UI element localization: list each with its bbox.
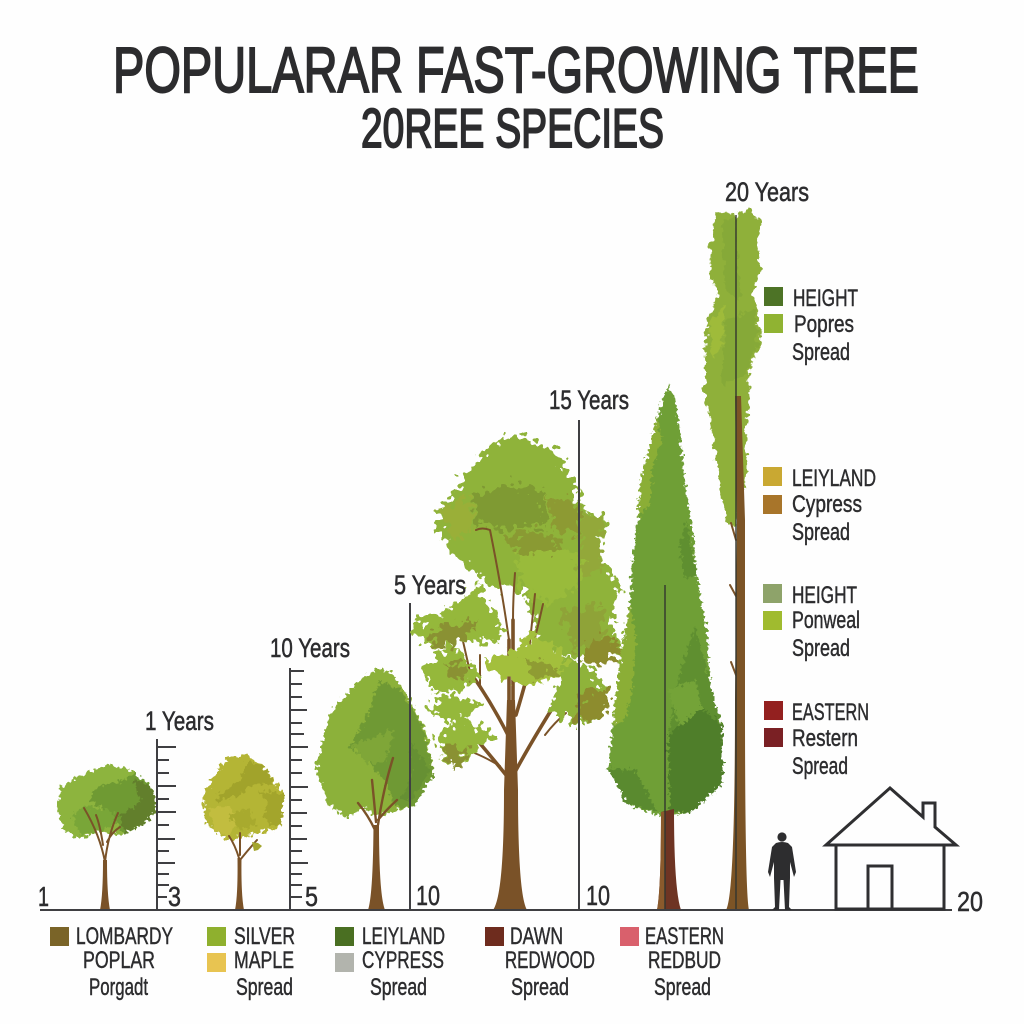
branches bbox=[84, 808, 120, 862]
year labels: 20 Years bbox=[725, 177, 809, 207]
side legend: height popres bbox=[764, 285, 858, 366]
title: 20REE SPECIES bbox=[361, 97, 664, 159]
year lines inside conifer and poplar bbox=[665, 215, 736, 910]
legend: dawn redwood bbox=[485, 923, 595, 1001]
axis numbers: 10 bbox=[416, 880, 440, 911]
year labels: 10 Years bbox=[270, 633, 350, 663]
person silhouette bbox=[768, 832, 796, 910]
axis numbers: 3 bbox=[168, 881, 181, 912]
tree: dawn redwood bbox=[412, 433, 624, 910]
year line: 15 bbox=[578, 420, 580, 910]
legend: silver maple: Spread bbox=[236, 974, 293, 1001]
ground baseline bbox=[40, 909, 952, 911]
poplar trunk bbox=[726, 396, 749, 910]
title bbox=[113, 34, 919, 159]
legend: leyland cypress: Spread bbox=[370, 974, 427, 1001]
tree: lombardy poplar at year 1 bbox=[57, 764, 157, 910]
side legend: eastern restern: Restern bbox=[792, 725, 858, 752]
legend: silver maple: MAPLE bbox=[234, 947, 294, 974]
legend: lombardy poplar bbox=[50, 923, 173, 1001]
year labels: 5 Years bbox=[394, 570, 466, 600]
side legend: height popres: Popres bbox=[794, 311, 854, 338]
branches bbox=[229, 833, 257, 860]
year labels: 15 Years bbox=[549, 385, 629, 415]
tree: cypress with tall conical crown bbox=[608, 385, 723, 910]
legend: leyland cypress: CYPRESS bbox=[362, 947, 444, 974]
axis numbers: 1 bbox=[38, 881, 49, 912]
axis numbers: 5 bbox=[305, 881, 318, 912]
trunk bbox=[493, 700, 527, 910]
upper crown bbox=[434, 433, 624, 664]
legend: leyland cypress: LEIYLAND bbox=[362, 923, 445, 950]
side legend: height ponweal: Spread bbox=[792, 635, 850, 662]
side legend: height popres: HEIGHT bbox=[793, 285, 858, 312]
side legend: leiyland cypress: Cypress bbox=[792, 491, 862, 518]
house outline bbox=[826, 788, 956, 909]
legend: lombardy poplar: POPLAR bbox=[83, 947, 155, 974]
cypress trunk bbox=[657, 809, 681, 910]
scale ruler: year 5 bbox=[290, 668, 308, 910]
axis numbers: 20 bbox=[957, 886, 983, 917]
lower clusters bbox=[412, 586, 610, 770]
side legend: eastern restern: EASTERN bbox=[792, 699, 869, 726]
tree: silver maple at year 3 bbox=[203, 755, 283, 910]
legend: silver maple: SILVER bbox=[234, 923, 295, 950]
legend: eastern redbud bbox=[620, 923, 724, 1001]
year labels bbox=[145, 177, 809, 736]
legend: leyland cypress bbox=[335, 923, 445, 1001]
tree: leyland cypress young at year 5 bbox=[316, 669, 434, 910]
branch stubs bbox=[730, 523, 736, 675]
legend: dawn redwood: Spread bbox=[511, 974, 569, 1001]
small leaf sprig bbox=[252, 842, 262, 851]
legend: lombardy poplar: Porgadt bbox=[89, 974, 148, 1001]
year line: 10 bbox=[409, 603, 411, 910]
legend: dawn redwood: REDWOOD bbox=[505, 947, 595, 974]
side legend: leiyland cypress bbox=[763, 465, 876, 546]
side legend: eastern restern bbox=[764, 699, 869, 780]
side legend: eastern restern: Spread bbox=[792, 753, 848, 780]
trunk bbox=[100, 860, 110, 910]
axis numbers bbox=[38, 880, 983, 917]
year labels: 1 Years bbox=[145, 706, 214, 736]
scale ruler: year 1 bbox=[157, 739, 176, 910]
side legend: leiyland cypress: LEIYLAND bbox=[792, 465, 876, 492]
legend: eastern redbud: EASTERN bbox=[645, 923, 724, 950]
side legend: height popres: Spread bbox=[792, 339, 850, 366]
axis numbers: 10 bbox=[586, 880, 610, 911]
branches bbox=[470, 620, 567, 775]
side legend: height ponweal: HEIGHT bbox=[792, 582, 857, 609]
legend: dawn redwood: DAWN bbox=[510, 923, 563, 950]
side legend: height ponweal bbox=[763, 582, 860, 662]
trunk bbox=[368, 825, 385, 910]
side legend: height ponweal: Ponweal bbox=[792, 607, 860, 634]
legend: eastern redbud: REDBUD bbox=[648, 947, 721, 974]
legend: eastern redbud: Spread bbox=[654, 974, 711, 1001]
branches bbox=[358, 758, 397, 830]
side legend: leiyland cypress: Spread bbox=[792, 519, 850, 546]
trunk bbox=[235, 858, 244, 910]
poplar tall at year 20 bbox=[705, 208, 760, 910]
legend: silver maple bbox=[207, 923, 295, 1001]
legend: lombardy poplar: LOMBARDY bbox=[76, 923, 173, 950]
